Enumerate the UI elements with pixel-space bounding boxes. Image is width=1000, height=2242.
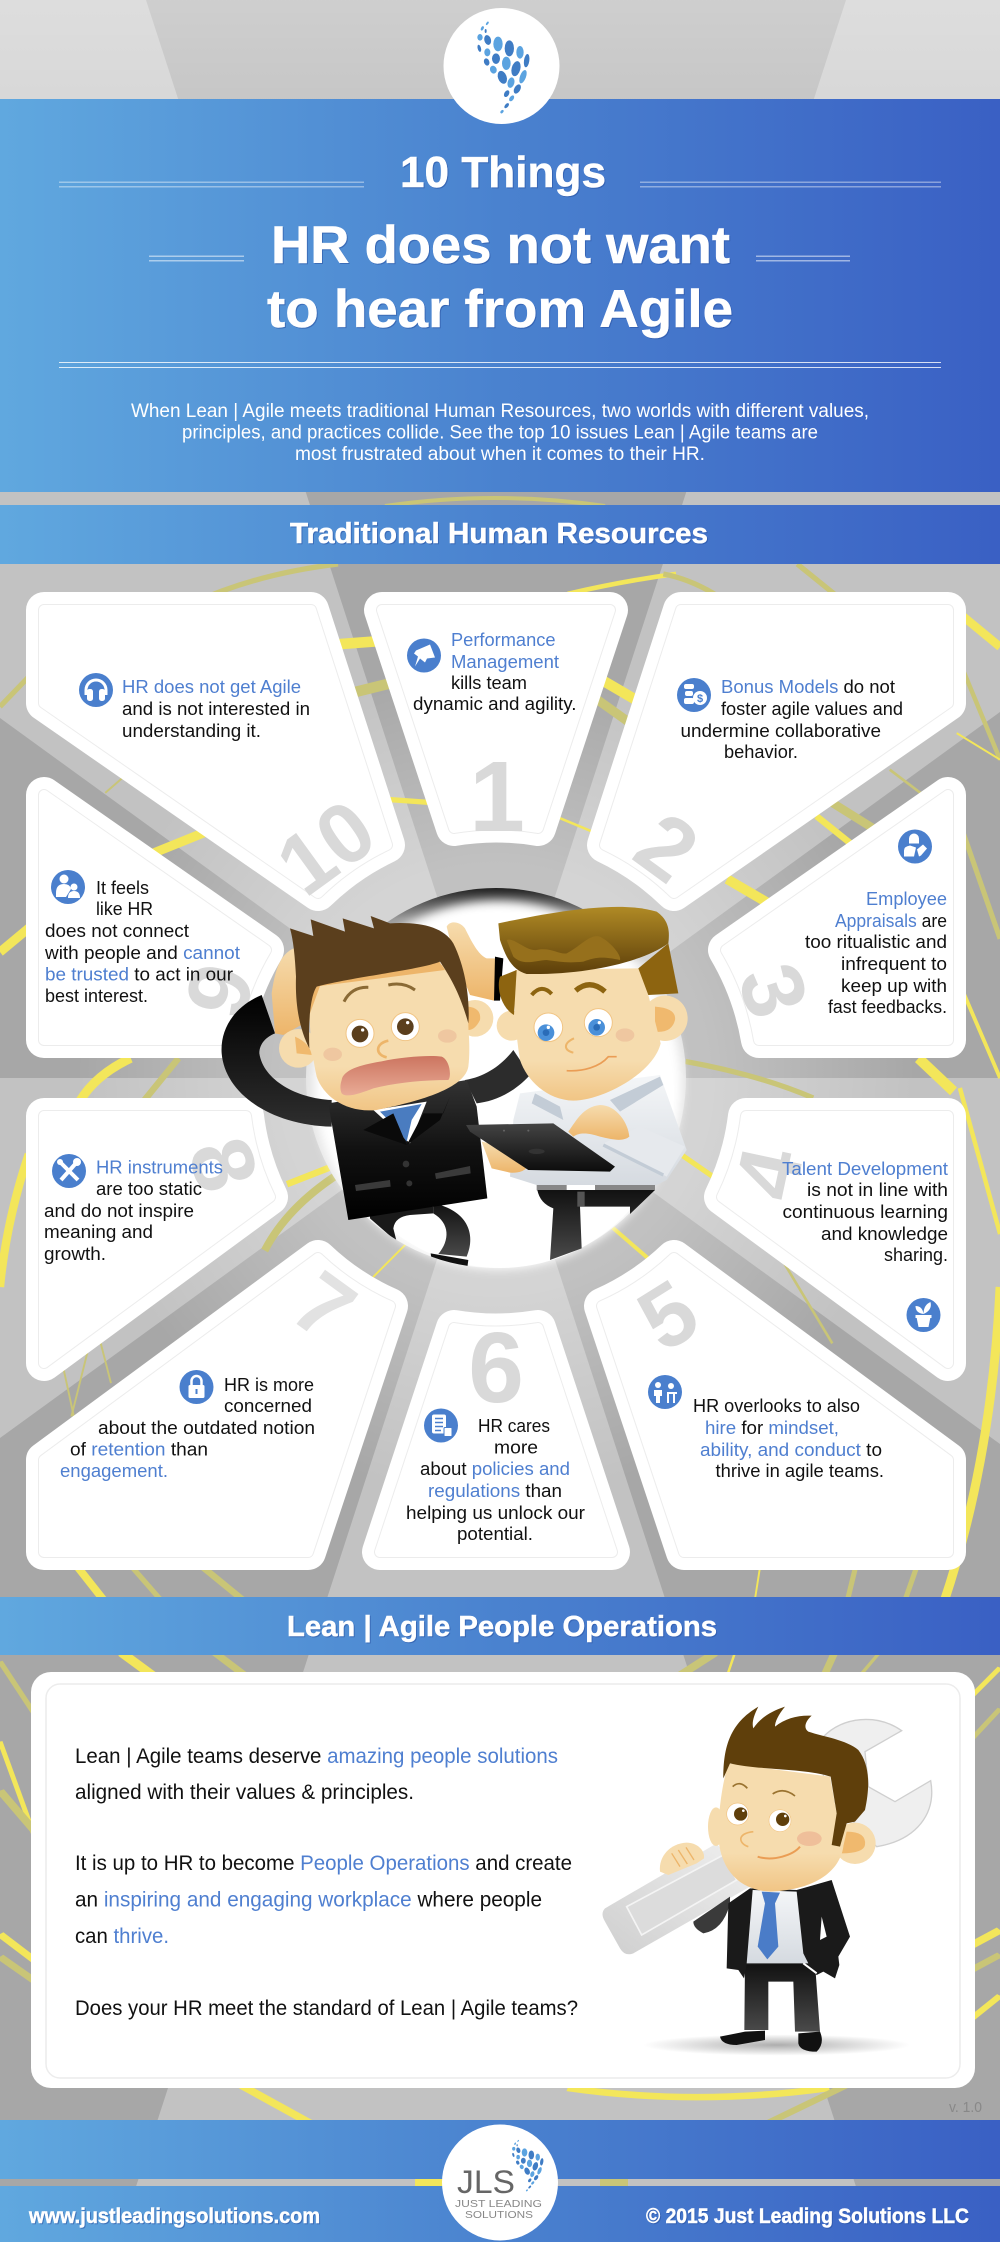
hand on wrench [660,1843,704,1875]
intro paragraph: most frustrated about when it comes to their HR. [295,444,705,465]
text: Talent Development [782,1158,948,1179]
panel 1 [382,610,610,853]
text: HR overlooks to also [693,1395,860,1416]
text [122,676,310,741]
title: to hear from Agile [267,280,733,339]
number 5: 5 [621,1260,715,1370]
icon: headphones [79,673,113,707]
text: understanding it. [122,720,261,741]
text: Performance [451,629,556,650]
title: 10 Things [400,148,606,197]
icon: coins [677,678,711,712]
text: regulations than [428,1480,562,1501]
text: fast feedbacks. [828,996,947,1017]
number 4: 4 [715,1139,822,1208]
text: keep up with [841,975,947,996]
text [693,1395,884,1481]
panel: call to action card [31,1672,975,2088]
text: ability, and conduct to [700,1439,882,1460]
text: with people and cannot [44,942,240,963]
version label: v. 1.0 [949,2099,982,2116]
number 8: 8 [169,1126,278,1203]
tablet and hands [466,1105,629,1173]
illustration: man with wrench [602,1707,932,2056]
text: and do not inspire [44,1200,194,1221]
text: potential. [457,1523,533,1544]
text: hire for mindset, [705,1417,839,1438]
icon: document [424,1408,458,1442]
logo badge: JLS: JLS [457,2164,515,2200]
intro paragraph [131,401,869,465]
text [413,629,576,714]
number 10: 10 [260,782,393,914]
text [44,1156,223,1264]
panel 9 [44,795,274,1040]
illustration: two businessmen with a tablet [222,907,688,1267]
text: about policies and [420,1458,570,1479]
closing text: aligned with their values & principles. [75,1781,414,1804]
icon: padlock [180,1370,214,1404]
text: Bonus Models do not [721,676,895,697]
intro paragraph: When Lean | Agile meets traditional Human Resources, two worlds with different values, [131,401,869,422]
logo badge: JLS [442,2124,558,2240]
worried man's suit and legs [328,1080,487,1267]
worried man's head [279,916,493,1110]
closing text [75,1745,578,2020]
text: and is not interested in [122,698,310,719]
smiling man [497,907,688,1260]
text: Employee [866,888,947,909]
text: helping us unlock our [406,1502,585,1523]
text: like HR [96,898,153,919]
icon: pushpin [407,638,441,672]
section band: Lean Agile People Operations: Lean | Agile People Operations [287,1611,717,1643]
copyright: © 2015 Just Leading Solutions LLC [646,2205,969,2228]
panel 3 [719,795,948,1040]
icon: crossed tools [52,1154,86,1188]
panel 5 [602,1258,948,1552]
yellow curves behind the lower card [0,1653,1000,2123]
panel 2 [605,610,948,902]
panel 4 [715,1116,948,1363]
text [44,877,240,1006]
closing text: an inspiring and engaging workplace where people [75,1888,542,1912]
wrench [602,1719,932,1954]
panel 6 [380,1312,612,1552]
text [60,1374,315,1481]
text: undermine collaborative [680,720,881,741]
text: more [494,1437,538,1458]
section band: Traditional Human Resources [0,505,1000,564]
section band: Traditional Human Resources: Traditional Human Resources [290,518,708,550]
icon: people at a desk [648,1375,682,1409]
text: It feels [96,877,149,898]
text: is not in line with [807,1179,948,1200]
closing text: It is up to HR to become People Operations and create [75,1852,572,1875]
text: HR cares [478,1415,550,1436]
text: kills team [451,672,527,693]
panel 7 [44,1252,390,1552]
website: www.justleadingsolutions.com [28,2205,320,2228]
text [805,888,947,1017]
text: best interest. [45,985,148,1006]
text: about the outdated notion [98,1417,315,1438]
logo badge: JLS: JUST LEADING [455,2198,542,2210]
text [680,676,903,762]
title [267,148,733,339]
number 2: 2 [618,793,716,902]
section band: Lean Agile People Operations [0,1597,1000,1655]
number 7: 7 [275,1252,373,1361]
strip arc under the header [385,498,605,506]
text: infrequent to [841,953,947,974]
yellow curves behind the panels [0,564,1000,1602]
icon: plant pot [906,1298,940,1332]
text: meaning and [44,1221,153,1242]
text: too ritualistic and [805,931,947,952]
number 6: 6 [468,1312,524,1424]
top header band [0,99,1000,492]
text: HR does not get Agile [122,676,301,697]
text: engagement. [60,1460,168,1481]
text: behavior. [724,741,798,762]
closing text: Does your HR meet the standard of Lean | Agile teams? [75,1997,578,2020]
text: continuous learning [782,1201,948,1222]
closing text: Lean | Agile teams deserve amazing people solutions [75,1745,558,1768]
closing text: can thrive. [75,1925,169,1948]
text: are too static [96,1178,202,1199]
number 9: 9 [165,952,274,1029]
text: sharing. [884,1244,948,1265]
text: foster agile values and [721,698,903,719]
text: of retention than [70,1439,208,1460]
text [782,1158,948,1265]
number 1: 1 [469,741,525,853]
text: does not connect [45,920,189,941]
head [708,1707,876,1892]
logo badge: JLS: SOLUTIONS [465,2209,533,2221]
intro paragraph: principles, and practices collide. See the top 10 issues Lean | Agile teams are [182,422,818,444]
panel 10 [44,610,393,914]
footer [0,2120,1000,2242]
text: be trusted to act in our [45,964,233,984]
text: HR is more [224,1374,314,1395]
text: and knowledge [821,1223,948,1244]
number 3: 3 [719,952,828,1029]
suit and legs [693,1880,850,2052]
text: Management [451,651,559,672]
text: Appraisals are [835,910,947,931]
central disc [306,888,686,1269]
text: growth. [44,1243,106,1264]
text: concerned [224,1395,312,1416]
text: HR instruments [96,1156,223,1178]
text [406,1415,585,1544]
panel 8 [44,1116,278,1363]
icon: two people [51,870,85,904]
worried man's arms and raised hand [222,922,530,1127]
title rules [59,182,941,368]
icon: person with pencil [898,830,932,864]
logo badge: top [444,8,560,124]
icon: coins: $ [697,693,703,705]
text: dynamic and agility. [413,693,576,714]
title: HR does not want [271,216,730,275]
text: thrive in agile teams. [716,1460,884,1481]
